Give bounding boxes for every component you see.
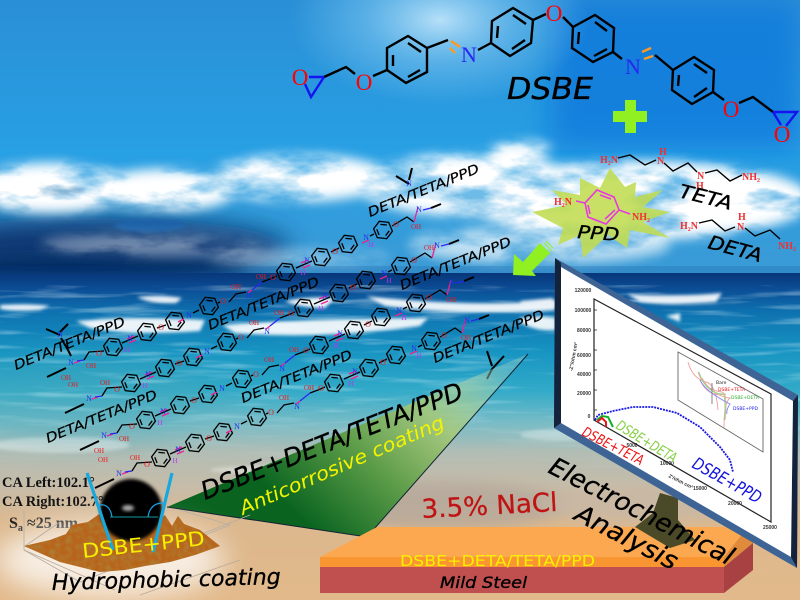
DSBE structure: N — [461, 42, 477, 67]
PPD starburst: H₂N — [554, 197, 573, 208]
chain 1: O — [393, 220, 399, 229]
chain 3: O — [426, 293, 432, 302]
DSBE structure — [292, 1, 797, 147]
Nyquist plot: Z'/ohm cm² — [667, 473, 694, 491]
chain 1: O — [332, 247, 338, 256]
clouds — [0, 130, 800, 275]
Nyquist plot: 0 — [588, 414, 591, 420]
Nyquist plot: 40000 — [577, 372, 591, 378]
contact angle readouts: CA Right:102.7° — [2, 494, 104, 510]
contact angle readouts: CA Left:102.1° — [2, 475, 95, 491]
steel label: Mild Steel — [440, 573, 528, 592]
DETA/TETA/PPD labels on chains: DETA/TETA/PPD — [12, 315, 128, 374]
electrochemical label: Electrochemical — [544, 452, 739, 571]
chain 2: O — [114, 385, 120, 394]
DETA label: DETA — [706, 232, 765, 267]
DSBE structure: N — [625, 54, 641, 79]
PPD starburst: NH₂ — [632, 212, 650, 223]
chain 1: O — [158, 323, 164, 332]
chain 2: N — [86, 394, 92, 403]
chain 4: N — [352, 367, 358, 376]
monitor: DSBE+TETA — [579, 424, 646, 469]
chain 1: H — [300, 269, 306, 277]
chain 1: N — [406, 179, 412, 188]
chain 1: N — [416, 205, 422, 214]
TETA structure: H — [659, 147, 667, 158]
chain 4: N — [116, 469, 122, 478]
polarization inset: DSBE+PPD — [733, 406, 758, 412]
monitor: DSBE+PPD — [689, 454, 765, 508]
contact angle readouts: S — [9, 515, 18, 532]
chain 4: OH — [304, 384, 314, 392]
chain 3: O — [253, 370, 259, 379]
chain 4: O — [268, 408, 274, 417]
Nyquist plot: 80000 — [577, 328, 591, 334]
TETA structure: H — [696, 181, 704, 192]
chain 4: OH — [461, 334, 471, 342]
Nyquist plot: 20000 — [577, 391, 591, 397]
NaCl label: 3.5% NaCl — [421, 488, 558, 525]
Nyquist plot: 60000 — [577, 353, 591, 359]
Nyquist plot: 20000 — [728, 501, 742, 507]
polarization inset: DSBE+DETA — [731, 395, 760, 401]
chain 2: H — [142, 382, 148, 390]
chain 2: OH — [424, 244, 434, 252]
chain 2: N — [145, 370, 151, 379]
chain 2: OH — [249, 319, 259, 327]
polarization inset: DSBE+TETA — [718, 387, 746, 393]
curve labels: DSBE+DETA — [613, 418, 679, 466]
chain 4: O — [144, 460, 150, 469]
TETA structure: N — [657, 156, 665, 167]
coating top surface — [320, 527, 748, 557]
chain 2: OH — [274, 309, 284, 317]
Nyquist plot: 10000 — [660, 461, 674, 467]
TETA structure: N — [697, 171, 705, 182]
PPD starburst: PPD — [577, 222, 620, 246]
anticorrosive label: Anticorrosive coating — [234, 412, 448, 520]
chain 4: O — [318, 384, 324, 393]
chain 3: OH — [119, 435, 129, 443]
DSBE+PPD label: DSBE+PPD — [81, 526, 206, 563]
polarization inset: Bare — [716, 380, 727, 386]
chain 3: OH — [446, 296, 456, 304]
chain 4: N — [294, 402, 300, 411]
chain 2: O — [238, 333, 244, 342]
chain 3: O — [129, 422, 135, 431]
wedge title: DSBE+DETA/TETA/PPD — [197, 377, 467, 506]
polarization inset — [678, 352, 763, 452]
Nyquist plot: -Z''/ohm cm² — [569, 342, 580, 372]
chain 2 — [65, 240, 459, 413]
chain 4: O — [380, 358, 386, 367]
chain 3: O — [365, 320, 371, 329]
chain 2: N — [434, 241, 440, 250]
DETA/TETA/PPD labels on chains: DETA/TETA/PPD — [398, 235, 514, 294]
monitor stand — [635, 493, 695, 548]
Nyquist plot: 15000 — [693, 486, 707, 492]
chain 2: O — [288, 309, 294, 318]
chain 1: OH — [61, 374, 71, 382]
TETA structure — [600, 147, 760, 192]
DSBE structure: O — [356, 70, 372, 95]
chain 2: O — [350, 283, 356, 292]
analysis label: Analysis — [568, 498, 683, 576]
chain 4: O — [441, 331, 447, 340]
chain 1: N — [68, 358, 74, 367]
chain 3: N — [219, 384, 225, 393]
chain 2: N — [381, 269, 387, 278]
steel front — [320, 567, 724, 593]
TETA label: TETA — [677, 181, 735, 215]
chain 4: O — [206, 434, 212, 443]
chain 2: N — [264, 327, 270, 336]
chain 4 — [95, 315, 504, 488]
chain 3: N — [337, 329, 343, 338]
chain 3: OH — [289, 346, 299, 354]
Nyquist plot: 120000 — [575, 288, 592, 294]
chain 3: N — [279, 364, 285, 373]
DETA/TETA/PPD labels on chains: DETA/TETA/PPD — [366, 162, 482, 221]
water droplet — [87, 473, 172, 552]
DSBE structure: O — [723, 97, 739, 122]
chain 1: OH — [411, 223, 421, 231]
chain 1: OH — [231, 283, 241, 291]
contact angle readouts: ≈25 nm — [23, 515, 79, 532]
chain 1: N — [246, 291, 252, 300]
PPD starburst — [532, 168, 670, 258]
chain 4: OH — [98, 456, 108, 464]
DSBE structure: O — [774, 122, 790, 147]
block side — [724, 527, 753, 567]
coated steel block — [320, 527, 753, 593]
Nyquist plot: 100000 — [575, 308, 592, 314]
chain 1: O — [96, 349, 102, 358]
Nyquist plot — [569, 288, 777, 531]
chain 2: H — [386, 277, 392, 285]
AFM hydrophobic surface — [0, 510, 250, 598]
Nyquist plot: 5000 — [626, 443, 638, 449]
chain 3: N — [101, 431, 107, 440]
chain 2: OH — [68, 381, 78, 389]
chain 2: N — [204, 347, 210, 356]
plus sign — [613, 100, 647, 133]
chain 1: H — [124, 346, 130, 354]
chain 1: O — [270, 273, 276, 282]
Nyquist plot: 25000 — [763, 525, 777, 531]
sea and beach — [0, 273, 800, 600]
TETA structure: H₂N — [600, 155, 619, 166]
chain 2: OH — [100, 379, 110, 387]
chain 4: N — [175, 445, 181, 454]
chain 3: OH — [264, 356, 274, 364]
DETA structure: NH₂ — [778, 241, 796, 252]
chain 3: O — [191, 396, 197, 405]
steel side — [724, 543, 753, 593]
coating front — [320, 557, 724, 567]
chain 4: N — [411, 344, 417, 353]
chain 1: OH — [256, 273, 266, 281]
contact angle readouts — [2, 475, 104, 534]
DSBE label: DSBE — [507, 72, 593, 107]
chain 1: N — [363, 233, 369, 242]
DETA/TETA/PPD labels on chains: DETA/TETA/PPD — [239, 348, 355, 407]
chain 2: O — [176, 359, 182, 368]
chain 1: N — [127, 334, 133, 343]
green arrow — [513, 241, 553, 276]
chain 1: O — [220, 297, 226, 306]
sky background — [0, 0, 800, 280]
DETA/TETA/PPD labels on chains: DETA/TETA/PPD — [44, 388, 160, 447]
coating label: DSBE+DETA/TETA/PPD — [400, 552, 595, 570]
DETA structure: H₂N — [680, 221, 699, 232]
chain 3: N — [396, 306, 402, 315]
polymer network chains — [46, 168, 504, 488]
chain 3 — [80, 277, 474, 455]
chain 1: OH — [86, 362, 96, 370]
chain 4: OH — [130, 454, 140, 462]
green coating wedge — [167, 354, 528, 537]
DETA/TETA/PPD labels on chains — [12, 162, 547, 447]
chain 4: H — [348, 380, 354, 388]
wedge edges — [167, 354, 528, 537]
chain 4: N — [234, 422, 240, 431]
chain 4: H — [416, 352, 422, 360]
DETA structure: N — [737, 222, 745, 233]
DETA/TETA/PPD labels on chains: DETA/TETA/PPD — [206, 275, 322, 334]
chain 3: N — [160, 407, 166, 416]
chain 1: H — [368, 241, 374, 249]
chain 3: H — [333, 342, 339, 350]
DSBE structure: O — [546, 1, 562, 26]
monitor — [554, 258, 798, 568]
chain 1: N — [57, 330, 63, 339]
chain 2: N — [322, 292, 328, 301]
hydrophobic coating label: Hydrophobic coating — [52, 565, 281, 596]
chain 3: H — [401, 314, 407, 322]
chain 1: N — [304, 256, 310, 265]
contact angle readouts: a — [18, 523, 23, 534]
chain 4: OH — [279, 394, 289, 402]
chain 1: N — [186, 311, 192, 320]
chain 4: N — [464, 316, 470, 325]
chain 4: H — [172, 457, 178, 465]
chain 3: H — [157, 419, 163, 427]
chain 2: O — [411, 256, 417, 265]
DSBE structure: O — [292, 65, 308, 90]
chain 3: O — [303, 346, 309, 355]
chain 3: N — [449, 278, 455, 287]
DETA structure: H — [738, 212, 746, 223]
TETA structure: NH₂ — [742, 172, 760, 183]
chain 2: H — [318, 305, 324, 313]
chain 3: OH — [94, 447, 104, 455]
DETA structure — [680, 212, 796, 252]
chain 1 — [46, 168, 441, 382]
DETA/TETA/PPD labels on chains: DETA/TETA/PPD — [431, 308, 547, 367]
